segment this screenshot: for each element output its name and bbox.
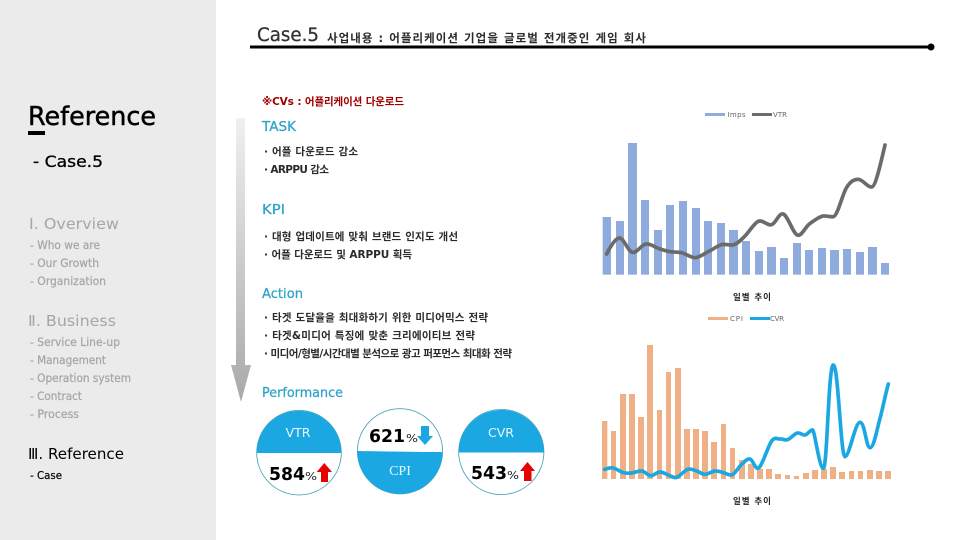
- section: Business: - Operation system: [30, 371, 131, 385]
- title: 사업내용 : 어플리케이션 기업을 글로벌 전개중인 게임 회사: [327, 31, 646, 45]
- axis caption: 일별 추이: [733, 292, 771, 303]
- section: Reference: [28, 445, 124, 482]
- metric circle: VTR: [257, 410, 341, 495]
- metric circle: VTR: VTR: [286, 425, 311, 440]
- chart legend: [708, 315, 784, 323]
- chart legend: Imps: [728, 111, 746, 119]
- section: Business: Ⅱ. Business: [28, 312, 116, 330]
- chart: CPI and CVR: [602, 315, 891, 507]
- chart legend: [705, 111, 787, 119]
- section: Overview: [29, 215, 119, 288]
- section: Business: - Service Line-up: [30, 335, 120, 349]
- heading: Action: Action: [262, 286, 303, 302]
- text: action items: · 타겟&미디어 특징에 맞춘 크리에이티브 전략: [264, 329, 475, 342]
- chart legend: CVR: [770, 315, 784, 323]
- text: task items: [264, 145, 358, 176]
- note: CVs definition: ※CVs : 어플리케이션 다운로드: [262, 95, 404, 108]
- text: action items: · 미디어/형별/시간대별 분석으로 광고 퍼포먼스 최대화 전략: [264, 347, 512, 360]
- axis caption: 일별 추이: [733, 496, 771, 507]
- text: KPI items: · 대형 업데이트에 맞춰 브랜드 인지도 개선: [264, 230, 458, 243]
- chart: Imps and VTR: [603, 111, 889, 303]
- text: task items: · 어플 다운로드 감소: [264, 145, 358, 158]
- line: VTR: [607, 145, 885, 258]
- section: Overview: - Our Growth: [30, 256, 99, 270]
- section: Overview: - Who we are: [30, 238, 100, 252]
- section: Business: [28, 312, 131, 421]
- metric circle: CPI: [357, 409, 443, 494]
- section: Business: - Management: [30, 353, 106, 367]
- section: Business: - Process: [30, 407, 79, 421]
- title: [257, 24, 646, 46]
- icon: up arrow: [520, 462, 535, 481]
- chart legend: VTR: [773, 111, 787, 119]
- chart legend: CPI: [730, 315, 743, 323]
- title: Case.5: [257, 24, 319, 46]
- icon: up arrow: [317, 463, 332, 482]
- bars: Imps: [603, 143, 889, 275]
- section: Reference: Ⅲ. Reference: [28, 445, 124, 463]
- metric circle: CPI: 621: [369, 426, 405, 447]
- text: action items: [264, 311, 512, 360]
- heading: Performance: Performance: [262, 385, 343, 401]
- metric circle: CVR: CVR: [488, 425, 514, 440]
- metric circle: CVR: %: [507, 469, 519, 482]
- heading underline bar: [28, 131, 45, 135]
- heading: TASK: TASK: [261, 119, 297, 135]
- metric circle: CVR: [459, 409, 544, 495]
- heading: Reference: Reference: [28, 102, 156, 132]
- icon: down arrow: [417, 426, 433, 445]
- section: Business: - Contract: [30, 389, 82, 403]
- section: Overview: Ⅰ. Overview: [29, 215, 119, 233]
- title rule with end dot: [250, 44, 934, 50]
- section: Reference: - Case: [30, 469, 62, 482]
- metric circle: VTR: 584: [269, 464, 305, 485]
- line: CVR: [605, 365, 888, 478]
- metric circle: CPI: %: [406, 432, 418, 445]
- text: task items: · ARPPU 감소: [264, 164, 329, 176]
- text: KPI items: · 어플 다운로드 및 ARPPU 획득: [264, 248, 412, 261]
- metric circle: VTR: %: [305, 470, 317, 483]
- text: KPI items: [264, 230, 458, 261]
- subheading: Case.5: - Case.5: [33, 152, 103, 171]
- section: Overview: - Organization: [30, 274, 106, 288]
- metric circle: CVR: 543: [471, 463, 507, 484]
- heading: KPI: KPI: [262, 202, 285, 218]
- bars: CPI: [602, 345, 891, 479]
- arrow: vertical flow: [231, 118, 251, 402]
- text: action items: · 타겟 도달율을 최대화하기 위한 미디어믹스 전략: [264, 311, 488, 324]
- metric circle: CPI: CPI: [389, 464, 411, 479]
- panel: sidebar navigation: [0, 0, 216, 540]
